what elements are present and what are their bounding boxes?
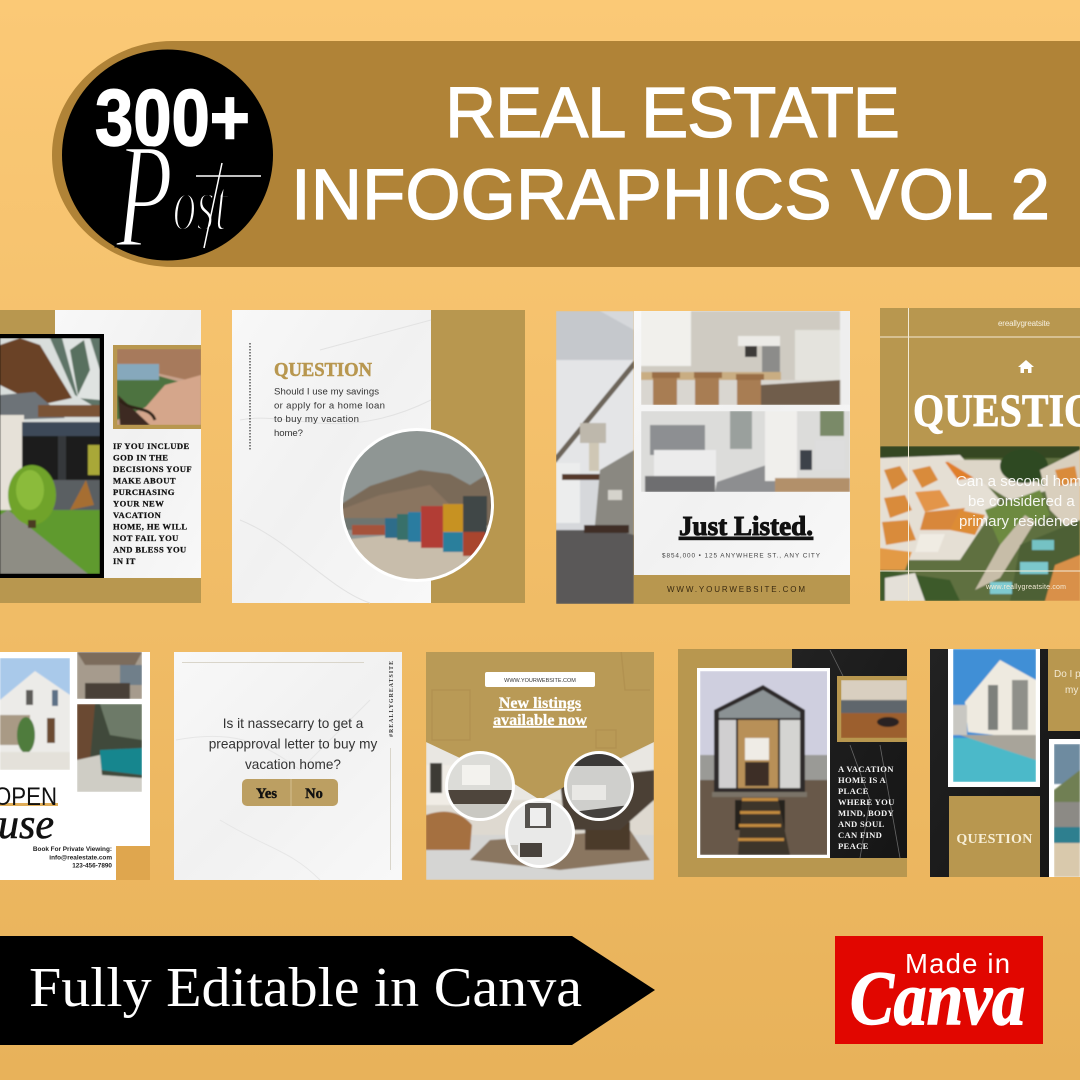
photo: staircase — [556, 311, 634, 604]
contact text: Book For Private Viewing: — [33, 846, 112, 853]
photo: beach huts circle — [340, 428, 494, 582]
quote text — [113, 441, 192, 566]
heading: New listings — [499, 695, 581, 712]
quote text: AND SOUL — [838, 819, 885, 829]
quote text: IF YOU INCLUDE — [113, 441, 190, 451]
quote text: VACATION — [113, 510, 162, 520]
photo: white house — [0, 658, 70, 770]
buttons: yes no: Yes — [256, 786, 277, 802]
gold square — [116, 846, 150, 880]
quote text: HOME, HE WILL — [113, 522, 188, 532]
card 7: new listings: WWW.YOURWEBSITE.COM — [504, 678, 576, 684]
quote text: HOME IS A — [838, 775, 887, 785]
question text — [274, 386, 385, 439]
quote text: MIND, BODY — [838, 808, 894, 818]
title: INFOGRAPHICS VOL 2 — [291, 156, 1050, 235]
quote text: MAKE ABOUT — [113, 476, 176, 486]
icon: house — [1018, 360, 1034, 373]
contact text: info@realestate.com — [49, 854, 112, 862]
gold text panel — [1048, 649, 1080, 731]
quote text: A VACATION — [838, 764, 894, 774]
card 5: open house — [0, 652, 150, 880]
vertical handle: #REALLYGREATSITE — [389, 661, 395, 737]
heading — [493, 695, 587, 729]
quote text — [838, 764, 895, 851]
heading: QUESTION — [274, 359, 373, 381]
buttons: yes no: No — [305, 786, 323, 802]
title: REAL ESTATE — [445, 74, 900, 153]
banner shape — [52, 41, 1080, 267]
question text: primary residence — [959, 513, 1078, 530]
card 4: question second home — [880, 308, 1080, 601]
badge: made in canva — [835, 936, 1043, 1044]
quote text: YOUR NEW — [113, 498, 164, 508]
quote text: WHERE YOU — [838, 797, 895, 807]
ribbon: fully editable: Fully Editable in Canva — [29, 957, 582, 1019]
photo: mountain pool — [1049, 739, 1080, 877]
buttons: yes no — [242, 779, 338, 806]
photo: house exterior — [0, 338, 100, 574]
badge: 300+ Post: 300+ — [95, 73, 250, 162]
badge: 300+ Post — [62, 50, 273, 278]
question text — [209, 716, 377, 772]
badge: made in canva: Made in — [905, 948, 1010, 979]
site footer: www.reallygreatsite.com — [985, 584, 1066, 591]
quote text: PURCHASING — [113, 487, 175, 497]
card 8: vacation home — [678, 649, 907, 877]
ribbon: fully editable — [0, 936, 655, 1045]
question text: to buy my vacation — [274, 414, 359, 425]
quote text: NOT FAIL YOU — [113, 533, 179, 543]
address: $854,000 • 125 ANYWHERE ST., ANY CITY — [662, 552, 821, 560]
card 6: preapproval — [174, 652, 402, 880]
heading: open — [0, 803, 58, 806]
quote text: PEACE — [838, 841, 869, 851]
quote text: DECISIONS YOUF — [113, 464, 192, 474]
photo: villa pool — [948, 649, 1040, 787]
badge: 300+ Post: P — [115, 113, 173, 278]
photo: kitchen — [641, 311, 850, 405]
contact text: 123-456-7890 — [72, 862, 112, 870]
quote text: IN IT — [113, 556, 136, 566]
question text: be considered a — [968, 493, 1075, 510]
badge: 300+ Post: ost — [173, 163, 229, 247]
photo: sunset beach — [837, 676, 907, 742]
quote text: AND BLESS YOU — [113, 544, 187, 554]
card 3: just listed — [556, 311, 850, 604]
heading: available now — [493, 712, 587, 729]
card 9: question pool: Do I p — [1054, 669, 1080, 680]
quote text: GOD IN THE — [113, 452, 168, 462]
gold panel — [949, 796, 1040, 877]
badge: made in canva: Canva — [850, 957, 1025, 1041]
question text: preapproval letter to buy my — [209, 736, 377, 752]
card 9: question pool — [930, 649, 1080, 877]
photo: bedroom — [641, 411, 850, 492]
website: WWW.YOURWEBSITE.COM — [667, 585, 805, 594]
question text: Is it nassecarry to get a — [223, 716, 364, 731]
contact text — [33, 846, 112, 868]
question text — [956, 473, 1080, 530]
photo: greenhouse cabin — [697, 668, 830, 858]
card 7: new listings — [426, 640, 654, 880]
quote text: PLACE — [838, 786, 869, 796]
site label: ereallygreatsite — [998, 319, 1051, 328]
gold overlay — [426, 652, 654, 800]
card 9: question pool: my — [1065, 685, 1078, 696]
photo circles — [445, 751, 635, 870]
question text: or apply for a home loan — [274, 400, 385, 412]
question text: Should I use my savings — [274, 386, 379, 398]
label: QUESTION — [956, 832, 1033, 847]
heading: Just Listed. — [679, 511, 813, 541]
photo: porch — [113, 345, 201, 429]
photo: aerial village — [880, 446, 1080, 601]
card 1: include God — [0, 310, 201, 603]
photo: interior — [77, 652, 142, 699]
site pill — [485, 672, 595, 687]
title — [291, 74, 1050, 235]
quote text: CAN FIND — [838, 830, 882, 840]
photo: pool — [77, 704, 142, 792]
header banner — [52, 41, 1080, 278]
photo: living room — [426, 742, 654, 880]
card 2: question savings — [232, 310, 525, 603]
question text: home? — [274, 428, 303, 439]
question text: vacation home? — [245, 757, 341, 772]
